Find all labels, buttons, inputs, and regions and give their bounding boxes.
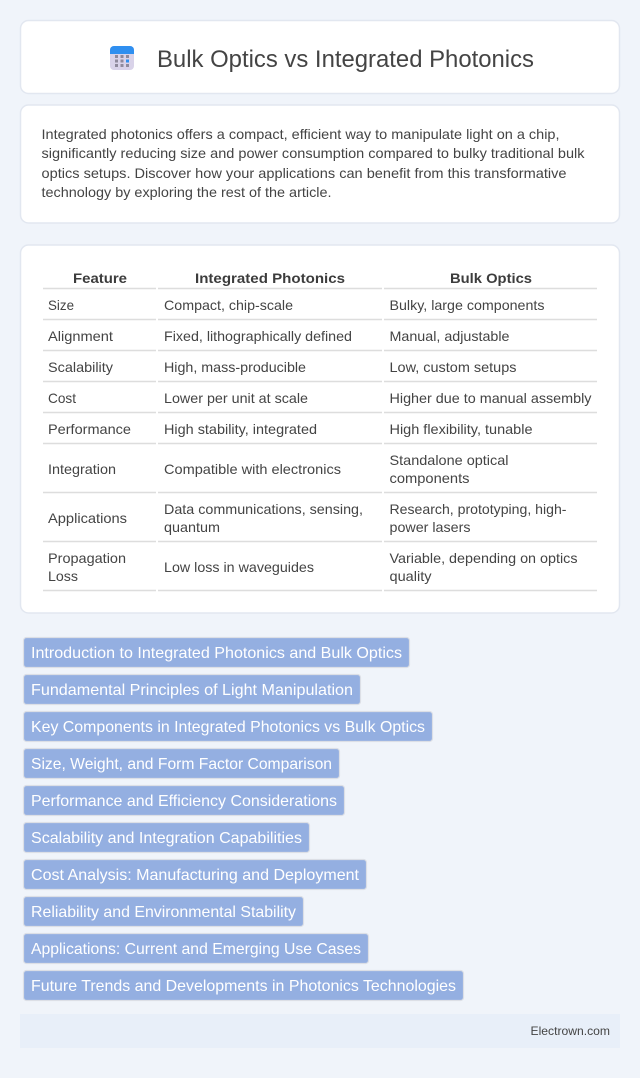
table row: applications: power lasers — [390, 519, 470, 535]
icon: calendar grid — [110, 46, 134, 70]
link chip 2: Fundamental Principles of Light Manipulation — [31, 682, 353, 699]
text block: intro paragraph: optics setups. Discover how your applications can benefit from this transformative — [42, 165, 567, 181]
table row: cost — [48, 390, 592, 406]
table row: integration — [48, 452, 508, 486]
link chip 2 — [24, 674, 360, 704]
table row: alignment: Manual, adjustable — [390, 328, 510, 344]
table row: applications: Research, prototyping, high- — [390, 501, 567, 517]
table row: performance: High stability, integrated — [164, 421, 317, 437]
table header: Feature — [73, 270, 127, 286]
text block: intro paragraph: Integrated photonics offers a compact, efficient way to manipulate light on a chip, — [42, 126, 560, 142]
table row: cost: Lower per unit at scale — [164, 390, 308, 406]
link chip 8 — [24, 896, 304, 926]
table row: size: Bulky, large components — [390, 297, 544, 313]
table row: size: Compact, chip-scale — [164, 297, 293, 313]
table row: scalability — [48, 359, 516, 375]
table row: propagation loss: Variable, depending on optics — [390, 550, 578, 566]
link chip 4 — [24, 748, 340, 778]
table row: propagation loss: quality — [390, 568, 432, 584]
link chip 4: Size, Weight, and Form Factor Comparison — [31, 756, 332, 773]
table row: applications: quantum — [164, 519, 220, 535]
table row: alignment — [48, 328, 510, 344]
footer: Electrown.com — [530, 1024, 610, 1038]
link chip 3: Key Components in Integrated Photonics vs Bulk Optics — [31, 719, 425, 736]
link chip 5 — [24, 786, 344, 816]
table header: Integrated Photonics — [195, 270, 345, 286]
link chip 1: Introduction to Integrated Photonics and Bulk Optics — [31, 645, 402, 662]
table row: scalability: High, mass-producible — [164, 359, 306, 375]
link chip 9 — [24, 934, 368, 964]
text block: intro paragraph — [42, 126, 586, 200]
link chip 8: Reliability and Environmental Stability — [31, 904, 296, 921]
table row: integration: Compatible with electronics — [164, 461, 341, 477]
table header — [73, 270, 532, 286]
table header: Bulk Optics — [450, 270, 532, 286]
link chip 1 — [24, 638, 410, 668]
link chip 6 — [24, 822, 310, 852]
table row: cost: Higher due to manual assembly — [390, 390, 592, 406]
table row: propagation loss: Loss — [48, 568, 78, 584]
table row: propagation loss: Propagation — [48, 550, 126, 566]
link chip 5: Performance and Efficiency Considerations — [31, 793, 337, 810]
table row: integration: Standalone optical — [390, 452, 508, 468]
text block: intro paragraph: significantly reducing size and power consumption compared to bulky traditional bulk — [42, 145, 586, 161]
table row: alignment: Alignment — [48, 328, 113, 344]
panel: header — [20, 20, 620, 94]
table row: performance: High flexibility, tunable — [390, 421, 533, 437]
table row: integration: Integration — [48, 461, 116, 477]
table row: applications: Applications — [48, 510, 127, 526]
link chip 3 — [24, 712, 432, 742]
link chip 7 — [24, 860, 366, 890]
table row: size — [48, 297, 544, 313]
link chip 9: Applications: Current and Emerging Use Cases — [31, 941, 361, 958]
link chip 7: Cost Analysis: Manufacturing and Deployment — [31, 867, 360, 884]
link chip 10: Future Trends and Developments in Photonics Technologies — [31, 978, 456, 995]
text block: intro paragraph: technology by exploring the rest of the article. — [42, 184, 332, 200]
table row: alignment: Fixed, lithographically defined — [164, 328, 352, 344]
link chip 10 — [24, 970, 464, 1000]
table row: integration: components — [390, 470, 470, 486]
section links — [24, 638, 464, 1000]
panel: intro — [20, 105, 620, 223]
table row: scalability: Scalability — [48, 359, 113, 375]
table row: size: Size — [48, 297, 74, 313]
table row: propagation loss: Low loss in waveguides — [164, 559, 314, 575]
table row: cost: Cost — [48, 390, 76, 406]
table row: scalability: Low, custom setups — [390, 359, 516, 375]
footer — [20, 1014, 620, 1048]
table row: applications — [48, 501, 567, 535]
table row: performance — [48, 421, 533, 437]
link chip 6: Scalability and Integration Capabilities — [31, 830, 302, 847]
table row: propagation loss — [48, 550, 578, 584]
table row: performance: Performance — [48, 421, 131, 437]
table row: applications: Data communications, sensing, — [164, 501, 363, 517]
title: Bulk Optics vs Integrated Photonics — [157, 46, 534, 73]
panel: comparison table — [20, 245, 620, 613]
